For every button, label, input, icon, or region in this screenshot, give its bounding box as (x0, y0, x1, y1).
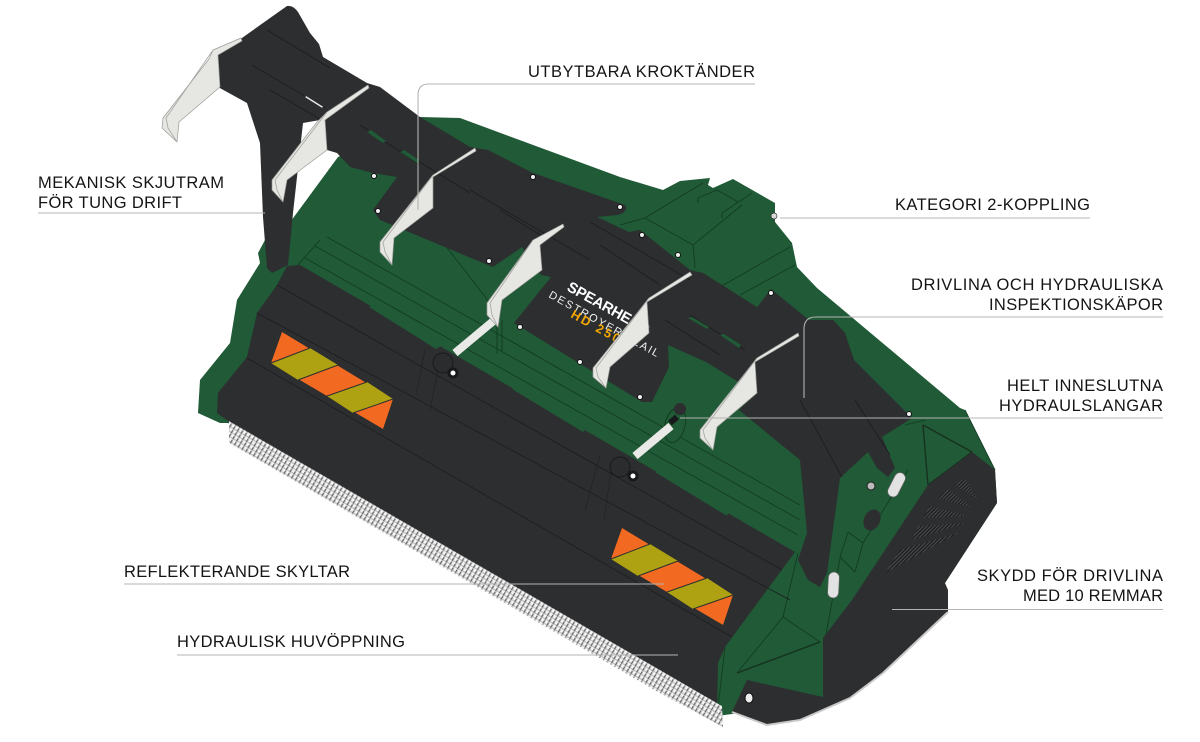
callout: skydd för drivlina: SKYDD FÖR DRIVLINA (977, 567, 1163, 585)
machine logo: HD 250 (569, 307, 623, 346)
hydraulic cylinders (433, 318, 689, 482)
vents (885, 478, 978, 573)
end bolt (745, 693, 753, 703)
housing seams (298, 183, 995, 716)
callout: reflekterande skyltar: REFLEKTERANDE SKYLTAR (124, 563, 350, 581)
callout: utbytbara kroktänder (418, 63, 755, 210)
callout: drivlina och hydrauliska inspektionskåpor: INSPEKTIONSKÄPOR (989, 296, 1163, 314)
callout: drivlina och hydrauliska inspektionskåpor (804, 276, 1163, 398)
callout: skydd för drivlina: MED 10 REMMAR (1023, 587, 1163, 605)
callout: mekanisk skjutram: MEKANISK SKJUTRAM (38, 174, 224, 192)
reflective sign left (271, 332, 393, 429)
drivetrain shield with vents (732, 452, 997, 725)
hook teeth (162, 38, 799, 450)
callout: skydd för drivlina (892, 567, 1163, 610)
upper rail and frame arms (218, 6, 912, 587)
callout: kategori 2-koppling: KATEGORI 2-KOPPLING (895, 196, 1090, 214)
callout: helt inneslutna hydraulslangar: HYDRAULSLANGAR (999, 397, 1163, 415)
callout: mekanisk skjutram: FÖR TUNG DRIFT (38, 194, 182, 212)
machine logo: DESTROYER FLAIL (547, 289, 661, 360)
callout: hydraulisk huvöppning: HYDRAULISK HUVÖPPNING (177, 633, 405, 651)
machine body: green housing (198, 117, 997, 716)
callout: utbytbara kroktänder: UTBYTBARA KROKTÄNDER (528, 63, 755, 81)
hood green strips (369, 305, 729, 516)
machine logo: SPEARHEAD (564, 279, 653, 338)
panel bolts (372, 174, 912, 416)
rail seams (252, 30, 890, 477)
callout: helt inneslutna hydraulslangar: HELT INNESLUTNA (1007, 377, 1163, 395)
callout: drivlina och hydrauliska inspektionskåpor: DRIVLINA OCH HYDRAULISKA (911, 276, 1163, 294)
callout: helt inneslutna hydraulslangar (680, 377, 1163, 418)
hydraulic hood (217, 265, 795, 716)
reflective sign right (611, 528, 733, 625)
green end details: hole and plates (771, 213, 907, 598)
callout: mekanisk skjutram (38, 174, 265, 213)
flail chain (229, 421, 723, 727)
